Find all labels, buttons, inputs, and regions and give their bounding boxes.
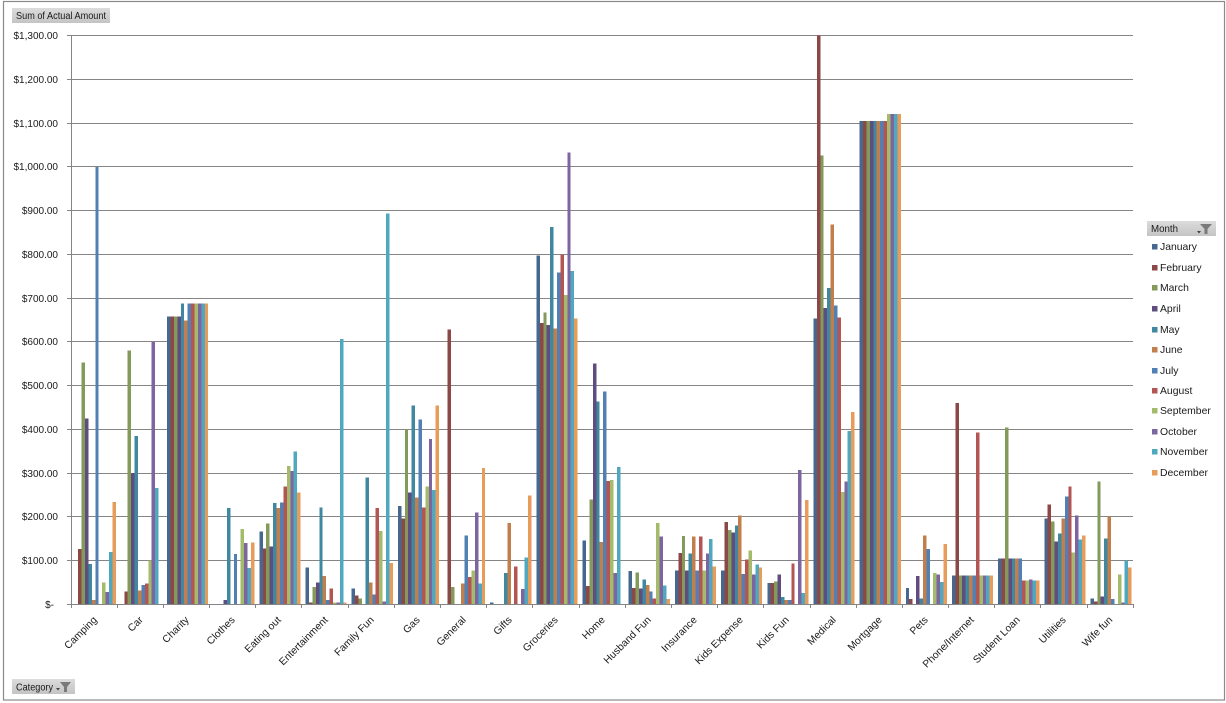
bars: Camping	[78, 167, 116, 605]
x axis with category labels: Entertainment	[278, 615, 331, 668]
x axis with category labels: General	[435, 615, 469, 649]
bars: Pets	[906, 535, 947, 604]
field button: Month filter	[1147, 221, 1216, 236]
x axis with category labels: Mortgage	[846, 615, 885, 653]
bars: Student Loan	[998, 428, 1039, 604]
field button: Month filter: Month	[1151, 224, 1178, 235]
x axis with category labels: Kids Fun	[755, 615, 792, 651]
x axis with category labels: Insurance	[660, 615, 700, 655]
legend item: November: November	[1160, 447, 1208, 458]
legend item: October: October	[1160, 427, 1198, 438]
x axis with category labels: Groceries	[521, 615, 561, 654]
legend item: January: January	[1160, 242, 1198, 253]
bars: Charity	[167, 303, 208, 604]
field button: Category filter	[12, 679, 75, 694]
x axis with category labels: Eating out	[243, 615, 284, 655]
bars: Car	[124, 342, 159, 604]
x axis with category labels: Clothes	[205, 615, 238, 647]
x axis with category labels: Medical	[806, 615, 839, 648]
x axis with category labels: Gifts	[492, 615, 515, 638]
bars: Kids Expense	[721, 516, 762, 604]
x axis with category labels: Home	[580, 615, 608, 642]
field button: Sum of Actual Amount: Sum of Actual Amount	[16, 11, 106, 22]
x axis with category labels: Student Loan	[972, 615, 1023, 666]
bars: Entertainment	[306, 339, 347, 604]
y axis: $1,100.00	[14, 119, 58, 130]
x axis with category labels: Camping	[63, 615, 100, 652]
y axis: $300.00	[22, 469, 58, 480]
legend item: May	[1152, 325, 1180, 336]
legend item: February: February	[1160, 263, 1202, 274]
x axis with category labels: Husband Fun	[602, 615, 654, 666]
x axis with category labels: Family Fun	[333, 615, 377, 659]
y axis: $600.00	[22, 337, 58, 348]
legend item: June: June	[1160, 345, 1183, 356]
bars: Utilities	[1044, 486, 1085, 604]
x axis with category labels: Phone/Internet	[921, 615, 977, 670]
bars: Medical	[813, 35, 855, 605]
bars: Clothes	[224, 508, 254, 604]
y axis: $800.00	[22, 250, 58, 261]
legend item: May: May	[1160, 325, 1180, 336]
bars: Wife fun	[1090, 482, 1132, 604]
bars: Mortgage	[860, 114, 901, 605]
x axis with category labels: Utilities	[1037, 615, 1069, 646]
x axis with category labels: Wife fun	[1081, 615, 1115, 649]
y axis: $200.00	[22, 512, 58, 523]
legend item: August: August	[1160, 386, 1192, 397]
x axis with category labels: Charity	[161, 614, 192, 646]
x axis with category labels: Car	[126, 614, 146, 634]
legend item: July: July	[1160, 366, 1179, 377]
y axis: $1,300.00	[14, 31, 58, 42]
bars: Gifts	[490, 496, 531, 604]
y axis: $1,000.00	[14, 162, 58, 173]
x axis with category labels: Gas	[401, 615, 423, 636]
bars: Phone/Internet	[952, 403, 993, 604]
bars: General	[447, 330, 485, 604]
x axis with category labels: Pets	[908, 615, 931, 637]
field button: Sum of Actual Amount	[12, 8, 110, 23]
bars: Insurance	[675, 536, 716, 604]
bars: Family Fun	[352, 214, 393, 604]
bars: Husband Fun	[629, 523, 670, 604]
x axis with category labels	[63, 604, 1133, 670]
legend item: April: April	[1160, 304, 1181, 315]
bars: Eating out	[259, 451, 301, 604]
legend item: December: December	[1160, 468, 1208, 479]
bars: Groceries	[536, 152, 578, 604]
legend: months	[1152, 242, 1211, 479]
legend item: September: September	[1160, 406, 1211, 417]
bars: Kids Fun	[767, 470, 808, 604]
y axis	[14, 31, 72, 611]
legend item: July	[1152, 366, 1179, 377]
bars: Home	[583, 363, 620, 604]
legend item: March: March	[1160, 283, 1189, 294]
y axis: $-	[45, 600, 54, 611]
field button: Category filter: Category	[16, 682, 53, 694]
x axis with category labels: Kids Expense	[693, 615, 746, 667]
bars: Gas	[398, 405, 439, 604]
y axis: $700.00	[22, 294, 58, 305]
y axis: $400.00	[22, 425, 58, 436]
y axis: $100.00	[22, 556, 58, 567]
y axis: $1,200.00	[14, 75, 58, 86]
y axis: $900.00	[22, 206, 58, 217]
y axis: $500.00	[22, 381, 58, 392]
